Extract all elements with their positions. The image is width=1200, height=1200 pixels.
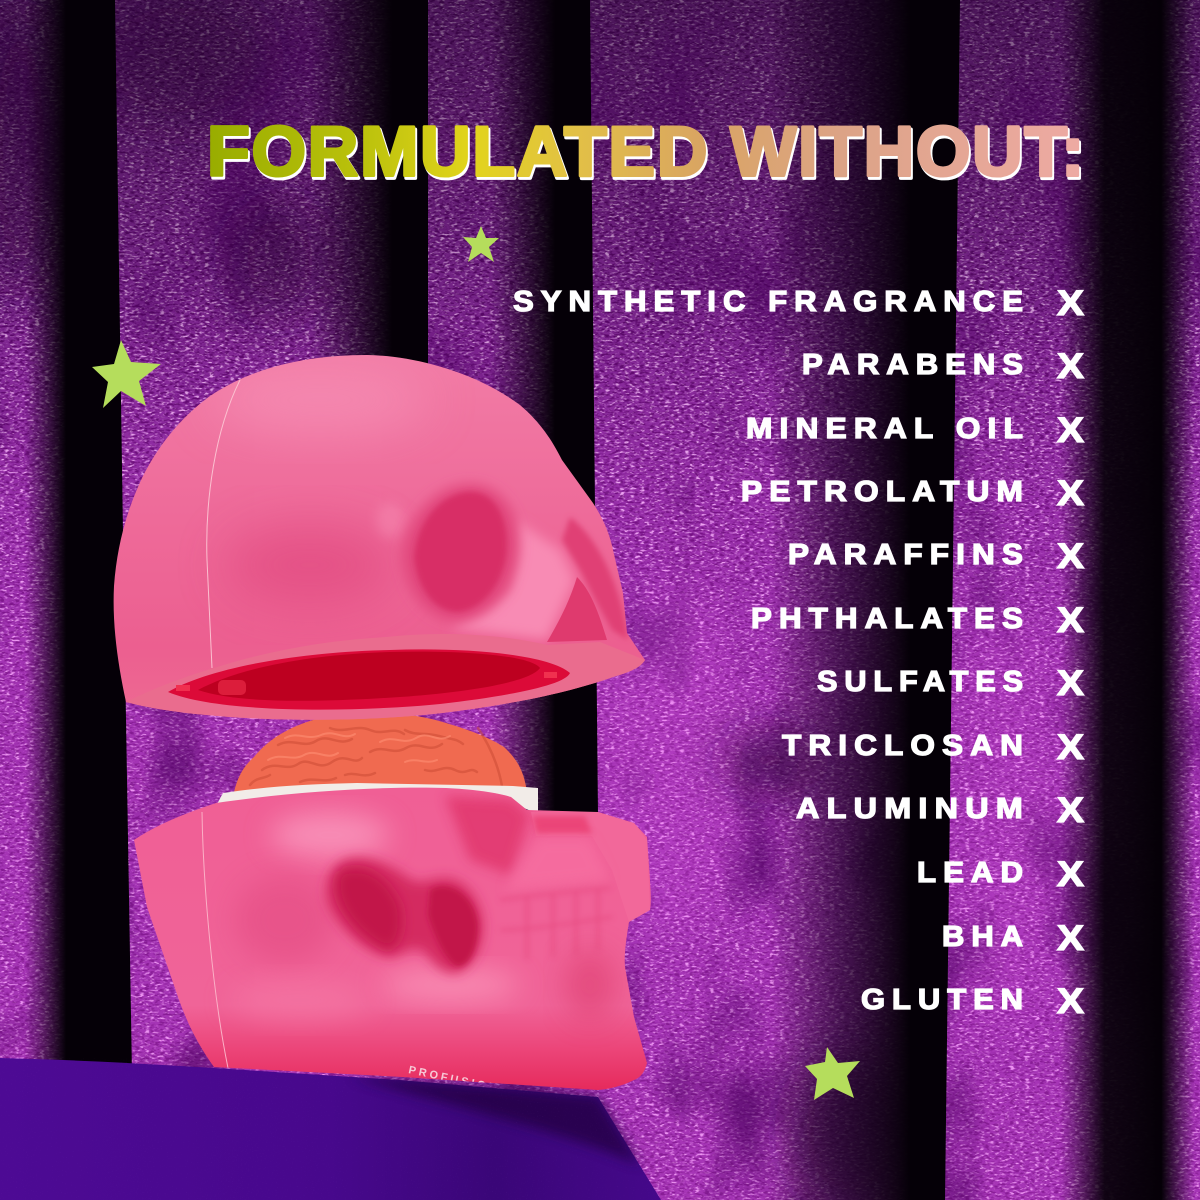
item: lead: LEAD <box>917 857 1030 889</box>
skull lower jaw <box>134 788 651 1095</box>
item: sulfates: SULFATES <box>817 666 1030 698</box>
item: synthetic fragrance: X <box>1057 284 1085 323</box>
seam line <box>202 812 228 1068</box>
item: lead <box>917 855 1085 894</box>
nose cavity <box>547 577 607 642</box>
item: parabens: PARABENS <box>802 349 1030 381</box>
far eye socket <box>562 517 628 640</box>
item: triclosan: TRICLOSAN <box>782 730 1030 762</box>
item: bha: X <box>1057 919 1085 958</box>
item: synthetic fragrance: SYNTHETIC FRAGRANCE <box>513 286 1030 318</box>
cranium opening <box>168 649 570 710</box>
eye socket: upper half <box>401 484 520 622</box>
shading: lower skull <box>230 796 650 1020</box>
shading: cranium <box>210 368 575 640</box>
seam line <box>207 380 240 668</box>
item: gluten <box>861 982 1085 1021</box>
item: gluten: GLUTEN <box>861 984 1030 1016</box>
skull upper cranium <box>114 355 645 720</box>
item: paraffins: X <box>1057 537 1085 576</box>
item: parabens <box>802 347 1085 386</box>
item: bha: BHA <box>942 921 1030 953</box>
star: top centre <box>463 226 499 262</box>
item: phthalates: PHTHALATES <box>751 603 1030 635</box>
item: paraffins: PARAFFINS <box>788 539 1030 571</box>
item: mineral oil <box>746 411 1085 450</box>
item: triclosan <box>782 728 1085 767</box>
cranium opening inner <box>198 652 540 701</box>
title: FORMULATED WITHOUT: <box>207 113 1086 191</box>
purple velvet cushion <box>0 1058 661 1200</box>
item: triclosan: X <box>1057 728 1085 767</box>
embossed brand text: PROFUSION <box>407 1064 500 1095</box>
brain <box>234 713 527 800</box>
cranium underside rim <box>126 634 645 720</box>
item: mineral oil: X <box>1057 411 1085 450</box>
item: phthalates <box>751 601 1085 640</box>
item: petrolatum: PETROLATUM <box>741 476 1030 508</box>
item: petrolatum <box>741 474 1085 513</box>
teeth <box>508 887 605 952</box>
item: synthetic fragrance <box>513 284 1085 323</box>
item: aluminum: ALUMINUM <box>796 793 1030 825</box>
star: left of skull <box>92 340 161 408</box>
item: aluminum <box>796 791 1085 830</box>
title: FORMULATED WITHOUT: <box>208 115 1087 194</box>
item: paraffins <box>788 537 1085 576</box>
star: bottom <box>805 1047 860 1100</box>
white inner cup rim <box>216 783 538 814</box>
item: lead: X <box>1057 855 1085 894</box>
item: gluten: X <box>1057 982 1085 1021</box>
eye socket: lower half <box>326 858 483 973</box>
item: bha <box>942 919 1085 958</box>
item: petrolatum: X <box>1057 474 1085 513</box>
item: sulfates: X <box>1057 664 1085 703</box>
item: mineral oil: MINERAL OIL <box>746 413 1030 445</box>
ingredient list <box>513 284 1085 1021</box>
lug notches <box>176 672 557 695</box>
item: sulfates <box>817 664 1085 703</box>
item: parabens: X <box>1057 347 1085 386</box>
item: phthalates: X <box>1057 601 1085 640</box>
item: aluminum: X <box>1057 791 1085 830</box>
